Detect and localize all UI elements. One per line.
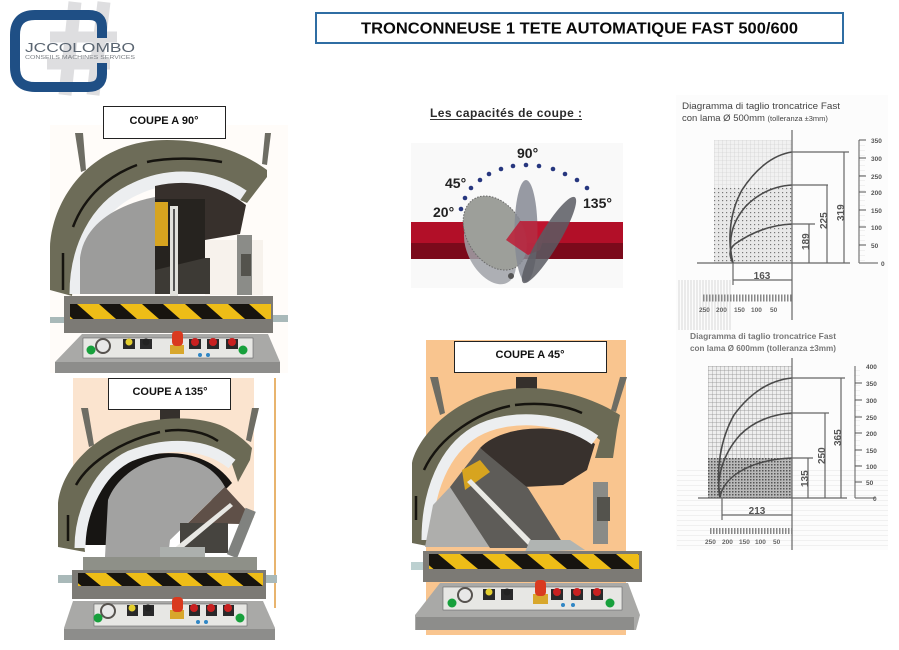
dimension values: 189: [801, 233, 812, 250]
dimension values: 225: [819, 212, 830, 229]
width scale: 50: [773, 539, 781, 546]
dotted cutting area: [714, 140, 792, 263]
dimension values: [749, 429, 844, 517]
width scale: 50: [770, 307, 778, 314]
red workpiece: [411, 222, 623, 259]
label: coupe a 135: [108, 378, 230, 410]
width scale: [677, 280, 792, 330]
machine photo: cut at 90 degrees: [50, 125, 288, 373]
axes and dimensions: [698, 358, 847, 550]
chart title: Diagramma di taglio troncatrice Fast: [682, 101, 840, 112]
height scale: 350: [866, 381, 877, 388]
label: coupe a 45: COUPE A 45°: [496, 349, 564, 361]
height scale: 50: [871, 243, 879, 250]
height scale: 300: [871, 156, 882, 163]
machine photo: cut at 135 degrees: [58, 378, 277, 640]
housing with hazard stripes: [58, 570, 277, 599]
saw blades: [450, 180, 583, 293]
width scale: 150: [739, 539, 750, 546]
height scale: 350: [871, 138, 882, 145]
chart title: [682, 101, 840, 124]
housing with hazard stripes: [411, 551, 642, 582]
angle labels: 90°: [517, 145, 538, 161]
chart title: con lama Ø 600mm (tolleranza ±3mm): [690, 343, 836, 353]
label: coupe a 90: [104, 106, 226, 138]
logo: JCCOLOMBO: [25, 40, 135, 55]
height scale: 100: [866, 464, 877, 471]
dimension values: 163: [754, 271, 771, 282]
curves: [730, 152, 792, 263]
width scale: 100: [751, 307, 762, 314]
height scale: 0: [873, 496, 877, 503]
title: TRONCONNEUSE 1 TETE AUTOMATIQUE FAST 500/600: [361, 20, 798, 38]
height scale: 250: [866, 415, 877, 422]
chart title: [690, 331, 836, 353]
width scale: 150: [734, 307, 745, 314]
title: [316, 13, 843, 43]
cutting capacities heading: Les capacités de coupe :: [430, 106, 582, 120]
dimension values: 319: [836, 204, 847, 221]
height scale: 100: [871, 225, 882, 232]
dotted cutting area: [708, 366, 792, 498]
cutting diagram: blade 500mm: [676, 95, 888, 330]
chart title: con lama Ø 500mm (tolleranza ±3mm): [682, 113, 828, 124]
angle labels: [433, 145, 612, 220]
dimension values: 135: [800, 470, 811, 487]
width scale: 100: [755, 539, 766, 546]
height scale: [859, 138, 885, 268]
height scale: 300: [866, 398, 877, 405]
angle labels: 45°: [445, 175, 466, 191]
label: coupe a 45: [454, 342, 606, 372]
height scale: 400: [866, 364, 877, 371]
width scale: 250: [699, 307, 710, 314]
label: coupe a 135: COUPE A 135°: [132, 386, 208, 398]
height scale: 0: [881, 261, 885, 268]
height scale: 250: [871, 174, 882, 181]
dimension values: 250: [817, 447, 828, 464]
logo: [15, 2, 136, 95]
height scale: [854, 364, 877, 503]
width scale: 250: [705, 539, 716, 546]
control console: [64, 597, 275, 640]
logo: CONSEILS MACHINES SERVICES: [25, 55, 136, 61]
angle labels: 135°: [583, 195, 612, 211]
control console: [55, 331, 280, 373]
control console: [415, 580, 640, 630]
dimension values: 365: [833, 429, 844, 446]
dimension values: 213: [749, 506, 766, 517]
housing with hazard stripes: [50, 296, 288, 333]
dimension values: [754, 204, 847, 282]
axes and dimensions: [697, 130, 850, 320]
cutting diagram: blade 600mm: [676, 330, 888, 550]
width scale: [705, 531, 792, 546]
height scale: 200: [871, 190, 882, 197]
height scale: 150: [871, 208, 882, 215]
height scale: 200: [866, 431, 877, 438]
width scale: 200: [722, 539, 733, 546]
curves: [719, 378, 792, 498]
angle labels: 20°: [433, 204, 454, 220]
chart title: Diagramma di taglio troncatrice Fast: [690, 331, 836, 341]
cutting angle diagram: [411, 143, 623, 293]
dotted arc: [459, 163, 589, 211]
label: coupe a 90: COUPE A 90°: [130, 115, 198, 127]
width scale: 200: [716, 307, 727, 314]
height scale: 50: [866, 480, 874, 487]
machine photo: cut at 45 degrees: [411, 340, 642, 635]
height scale: 150: [866, 448, 877, 455]
